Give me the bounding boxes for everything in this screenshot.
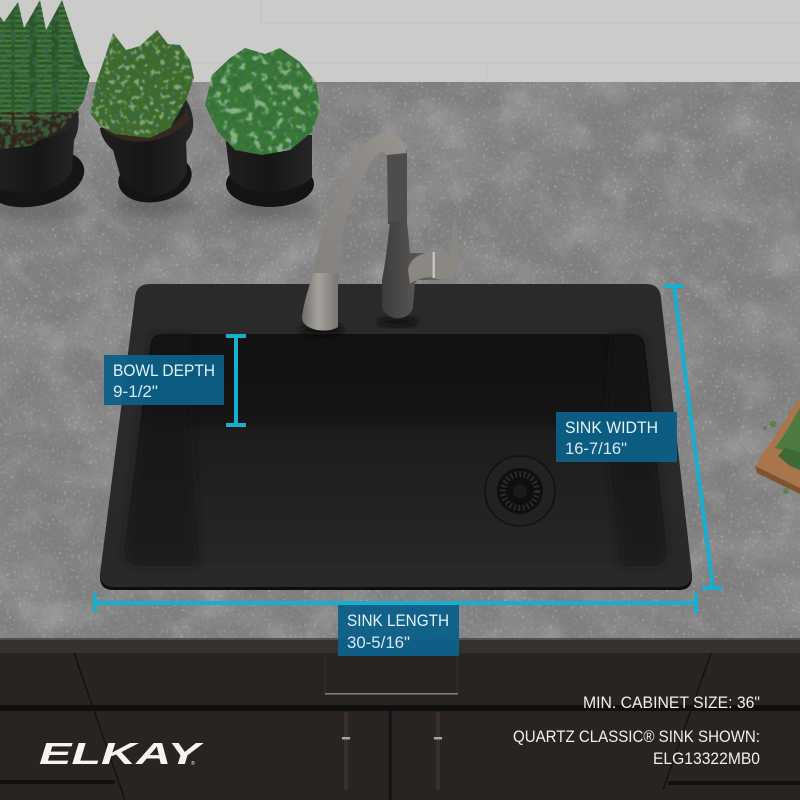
callout: sink width (556, 412, 677, 462)
plant: round herb (200, 44, 324, 207)
faucet base (302, 273, 338, 331)
cabinet pull: left door (344, 712, 348, 790)
saucer (114, 148, 196, 208)
faucet hub (408, 217, 458, 284)
sink bowl (124, 334, 667, 566)
cutting board with herbs (755, 400, 800, 494)
sink deck (100, 284, 692, 590)
pot (0, 111, 79, 193)
text: cabinet size: MIN. CABINET SIZE: 36" (583, 693, 760, 712)
dimension: sink length line (95, 593, 696, 614)
countertop (0, 82, 800, 642)
callout: sink length: SINK LENGTH (347, 612, 449, 630)
pot (100, 98, 193, 196)
plant: parsley (88, 28, 196, 208)
faucet (300, 133, 458, 335)
plant: rosemary (0, 0, 94, 216)
logo: Elkay: ® (191, 760, 195, 767)
callout: sink length: 30-5/16" (347, 634, 410, 652)
floor background (0, 0, 800, 84)
callout: sink length (338, 605, 459, 656)
drain (485, 456, 555, 526)
saucer (0, 140, 90, 216)
callout: bowl depth (104, 355, 224, 405)
logo: Elkay (39, 736, 205, 771)
text: sink shown: ELG13322MB0 (653, 749, 760, 768)
logo: Elkay: ELKAY (39, 736, 205, 771)
text: sink shown: QUARTZ CLASSIC® SINK SHOWN: (513, 727, 760, 746)
cabinets (0, 638, 800, 800)
pot (225, 135, 312, 192)
text: sink shown (513, 727, 760, 768)
saucer (226, 161, 314, 207)
dimension: bowl depth line (226, 334, 246, 427)
dimension: sink width line (664, 286, 722, 588)
callout: sink width: SINK WIDTH (565, 419, 658, 437)
shadows under pots (0, 193, 316, 220)
faucet body (382, 220, 450, 318)
faucet spout (313, 133, 407, 273)
callout: bowl depth: BOWL DEPTH (113, 362, 215, 380)
faucet pullout (387, 150, 407, 224)
cabinet pull: right door (436, 712, 440, 790)
cabinet pull: drawer (325, 656, 457, 694)
callout: bowl depth: 9-1/2" (113, 383, 158, 401)
callout: sink width: 16-7/16" (565, 440, 627, 458)
sink (100, 284, 692, 590)
